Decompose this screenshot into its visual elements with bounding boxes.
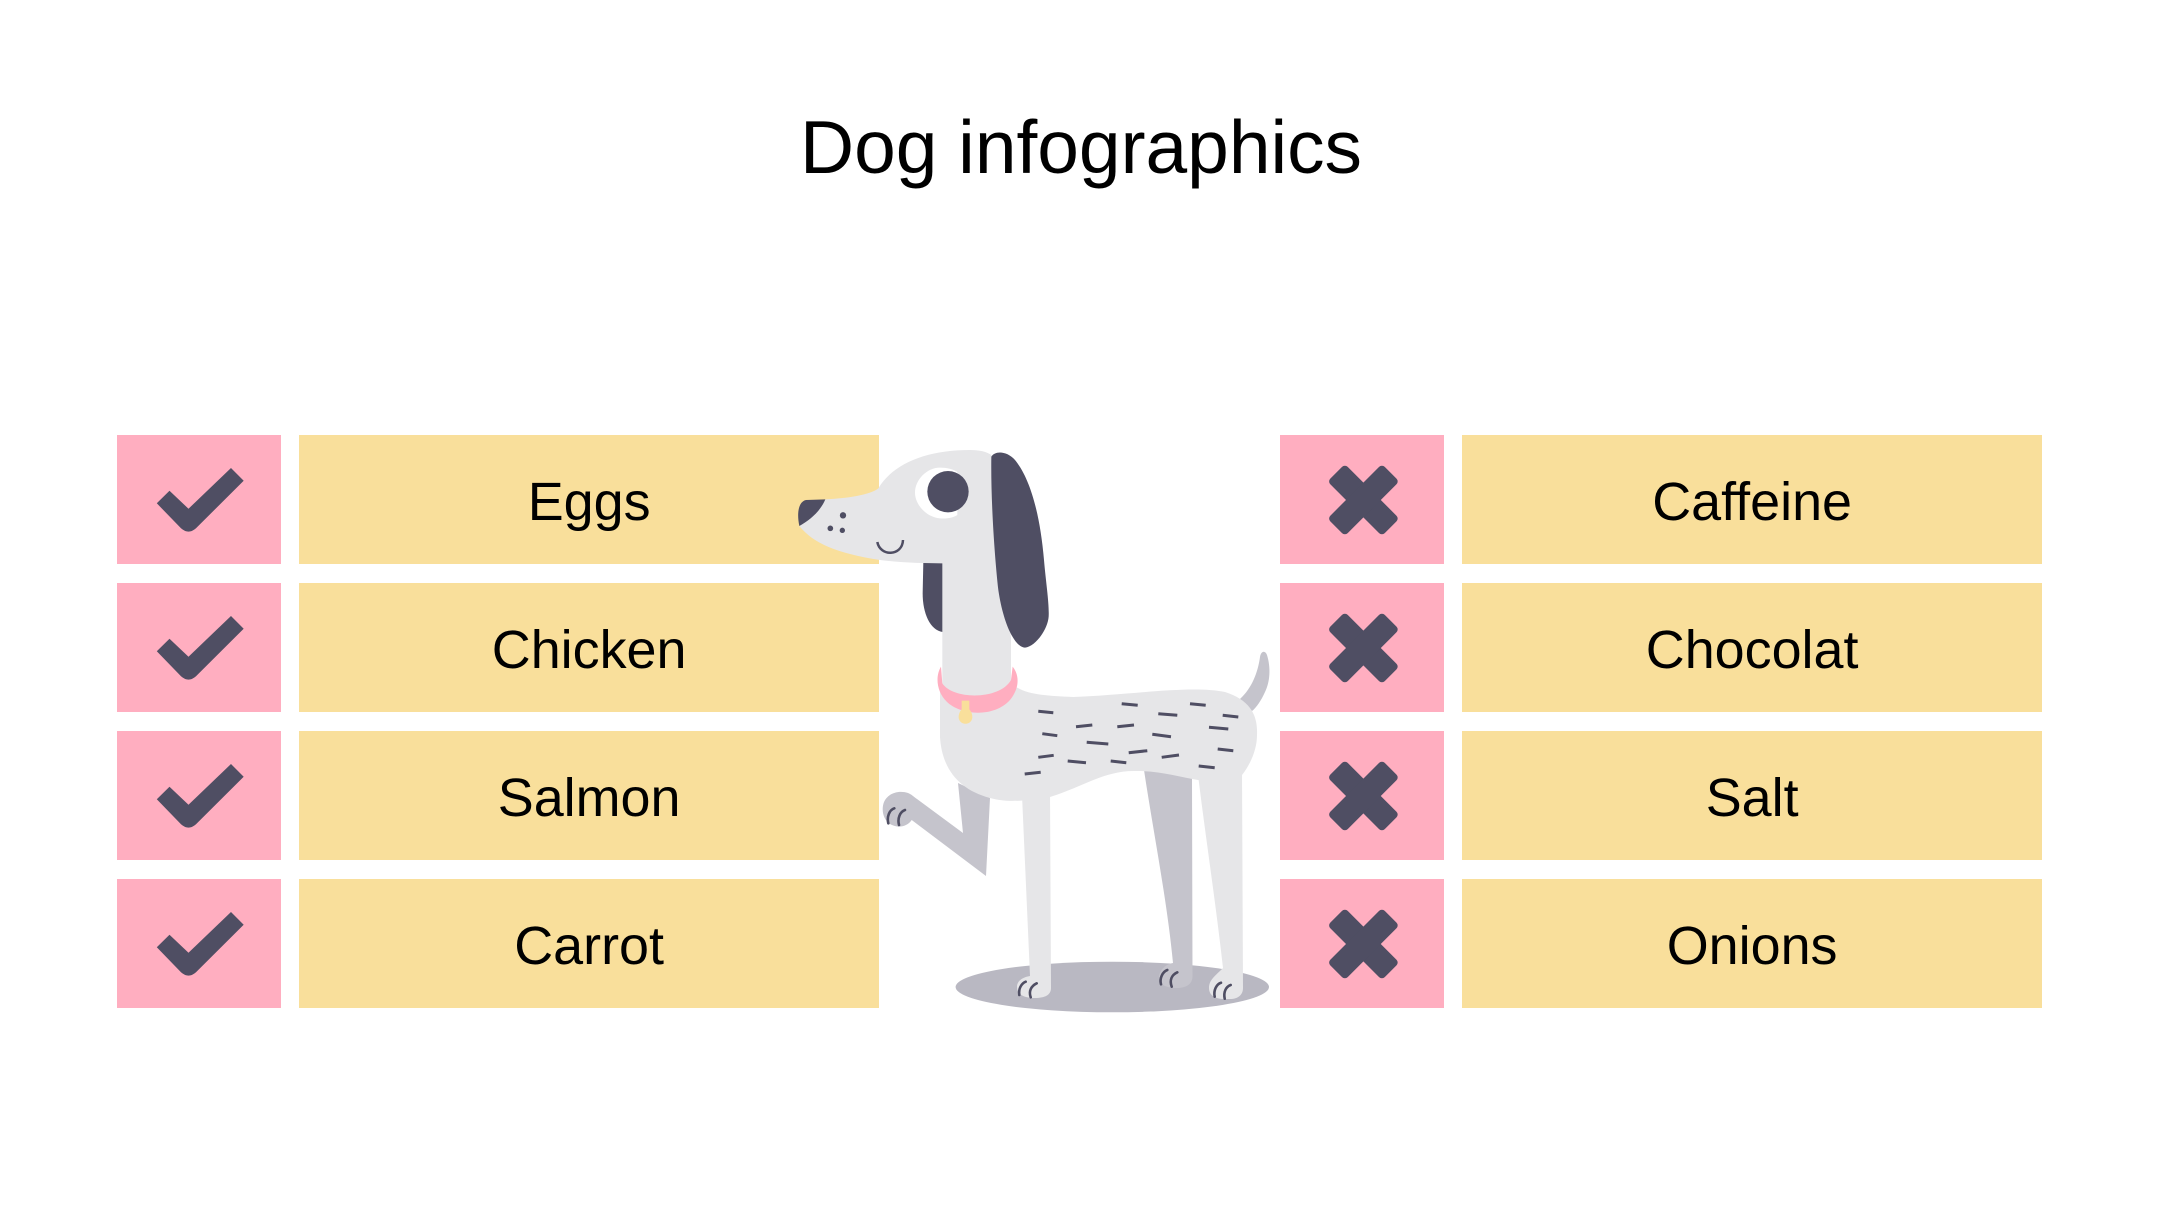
icon: cross mark xyxy=(1280,878,1444,1008)
row: Salmon xyxy=(117,731,879,860)
row: Caffeine: Caffeine xyxy=(1652,472,1852,532)
near front leg xyxy=(1017,790,1051,998)
body spots xyxy=(1025,704,1238,774)
nose xyxy=(798,499,825,526)
body xyxy=(940,685,1257,801)
icon: check mark xyxy=(117,878,281,1008)
eye white xyxy=(915,468,957,519)
eye pupil xyxy=(927,471,969,512)
panel: unsafe foods xyxy=(1280,435,2042,1008)
row: Salt: Salt xyxy=(1706,768,1799,828)
icon: cross mark xyxy=(1280,583,1444,712)
far back leg xyxy=(1144,770,1192,988)
collar tag xyxy=(959,701,972,724)
title: Dog infographics xyxy=(800,105,1362,189)
icon: check mark xyxy=(117,731,281,860)
left ear xyxy=(923,562,944,632)
collar xyxy=(938,667,1018,713)
panel: safe foods xyxy=(117,435,879,1008)
row: Chicken: Chicken xyxy=(492,620,686,680)
row: Salt xyxy=(1280,731,2042,860)
row: Eggs xyxy=(117,435,879,564)
toes xyxy=(888,808,1231,999)
row: Chocolat xyxy=(1280,583,2042,712)
nose dots xyxy=(827,512,846,533)
icon: cross mark xyxy=(1280,731,1444,860)
head and neck xyxy=(799,450,1011,697)
tail xyxy=(1240,652,1269,711)
row: Onions: Onions xyxy=(1667,916,1838,976)
icon: check mark xyxy=(117,583,281,712)
row: Eggs: Eggs xyxy=(528,472,651,532)
row: Carrot xyxy=(117,879,879,1008)
row: Onions xyxy=(1280,879,2042,1008)
near back leg xyxy=(1198,770,1243,999)
row: Chocolat: Chocolat xyxy=(1646,620,1858,680)
raised front leg xyxy=(883,783,990,876)
icon: cross mark xyxy=(1280,435,1444,564)
dog shadow xyxy=(956,962,1269,1012)
row: Carrot: Carrot xyxy=(514,916,664,976)
smile xyxy=(877,540,903,553)
row: Caffeine xyxy=(1280,435,2042,564)
icon: check mark xyxy=(117,435,281,564)
right ear xyxy=(991,453,1049,648)
row: Salmon: Salmon xyxy=(498,768,680,828)
row: Chicken xyxy=(117,583,879,712)
